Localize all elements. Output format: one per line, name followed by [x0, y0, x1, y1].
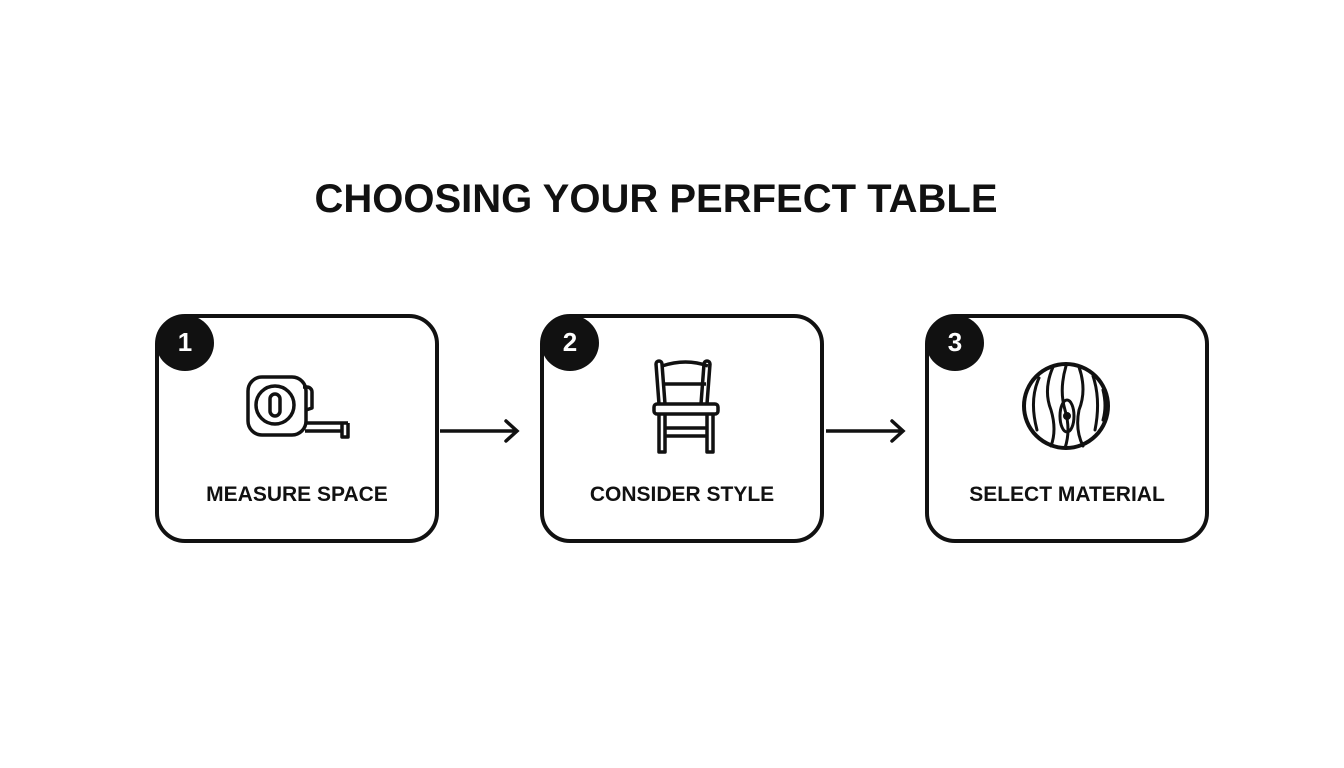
icon: wood grain: [1022, 362, 1110, 450]
label: MEASURE SPACE: [206, 483, 388, 506]
panel: step 2: [540, 314, 824, 543]
badge 3: [926, 315, 984, 371]
badge 2: 2: [563, 327, 577, 357]
arrow 2: [826, 419, 906, 443]
icon: tape measure: [246, 375, 350, 439]
badge 1: [156, 315, 214, 371]
arrow 1: [440, 419, 520, 443]
badge 2: [541, 315, 599, 371]
title: CHOOSING YOUR PERFECT TABLE: [314, 177, 998, 221]
badge 3: 3: [948, 327, 962, 357]
label: SELECT MATERIAL: [969, 483, 1165, 506]
panel: step 3: [925, 314, 1209, 543]
icon: chair: [652, 359, 720, 454]
badge 1: 1: [178, 327, 192, 357]
panel: step 1: [155, 314, 439, 543]
label: CONSIDER STYLE: [590, 483, 774, 506]
